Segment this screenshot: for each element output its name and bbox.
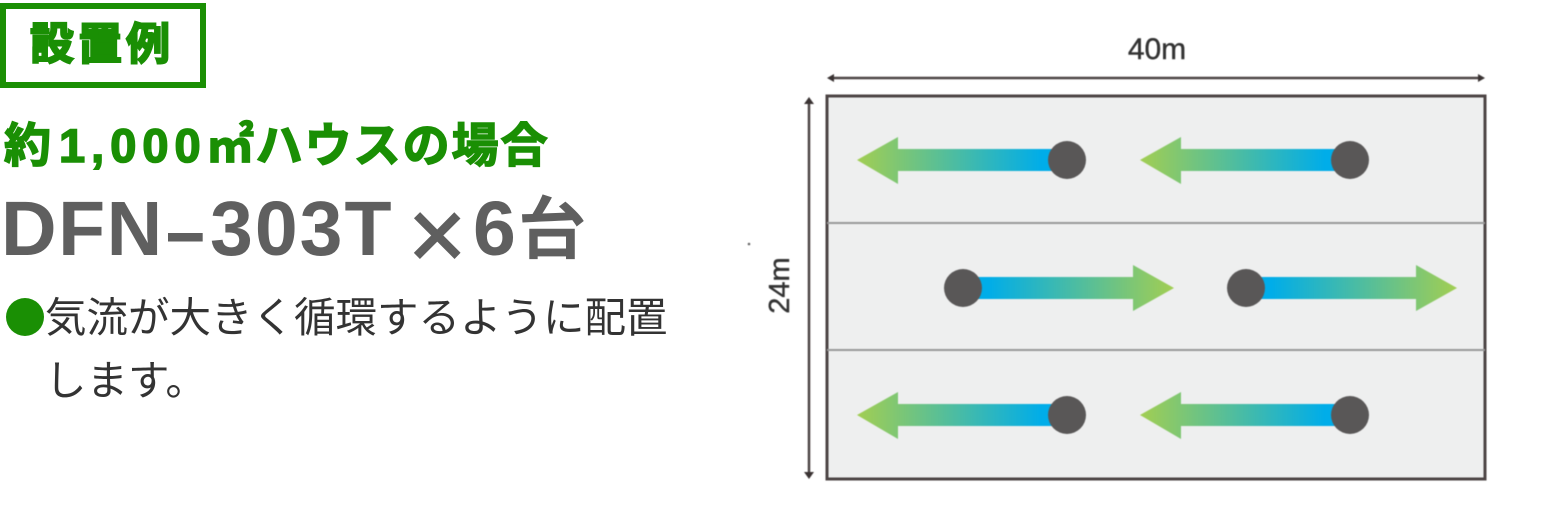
note text: 気流が大きく循環するように配置 [45, 294, 668, 341]
height dimension: 24m: 24m [764, 257, 796, 314]
icon: green bullet [6, 298, 44, 336]
model and quantity: DFN [1, 186, 164, 272]
width dimension: 40m: 40m [1128, 33, 1186, 66]
heading badge: 設置例 [0, 3, 206, 88]
height dimension: 24m [764, 97, 814, 479]
fan 1 airflow left [857, 137, 1086, 184]
model and quantity: 303T [210, 186, 394, 272]
room floor plan [827, 96, 1485, 479]
model and quantity [1, 179, 586, 291]
model and quantity: – [167, 195, 204, 269]
fan 5 airflow left [857, 392, 1086, 439]
note text [45, 294, 668, 404]
bullet note [6, 294, 668, 404]
layout diagram [747, 33, 1488, 482]
width dimension: 40m [827, 33, 1485, 82]
model and quantity: 6 [473, 186, 516, 272]
stray mark [748, 243, 750, 245]
fan 2 airflow left [1140, 137, 1369, 184]
fan 6 airflow left [1140, 392, 1369, 439]
note text: します。 [45, 357, 207, 404]
model and quantity: 台 [518, 192, 586, 268]
model and quantity: × [408, 179, 466, 291]
heading badge: 設置例: 設置例 [30, 20, 174, 69]
fan 3 airflow right [944, 265, 1174, 311]
fan 4 airflow right [1227, 265, 1457, 311]
subheading: house size: 約1,000㎡ハウスの場合 [4, 119, 550, 172]
